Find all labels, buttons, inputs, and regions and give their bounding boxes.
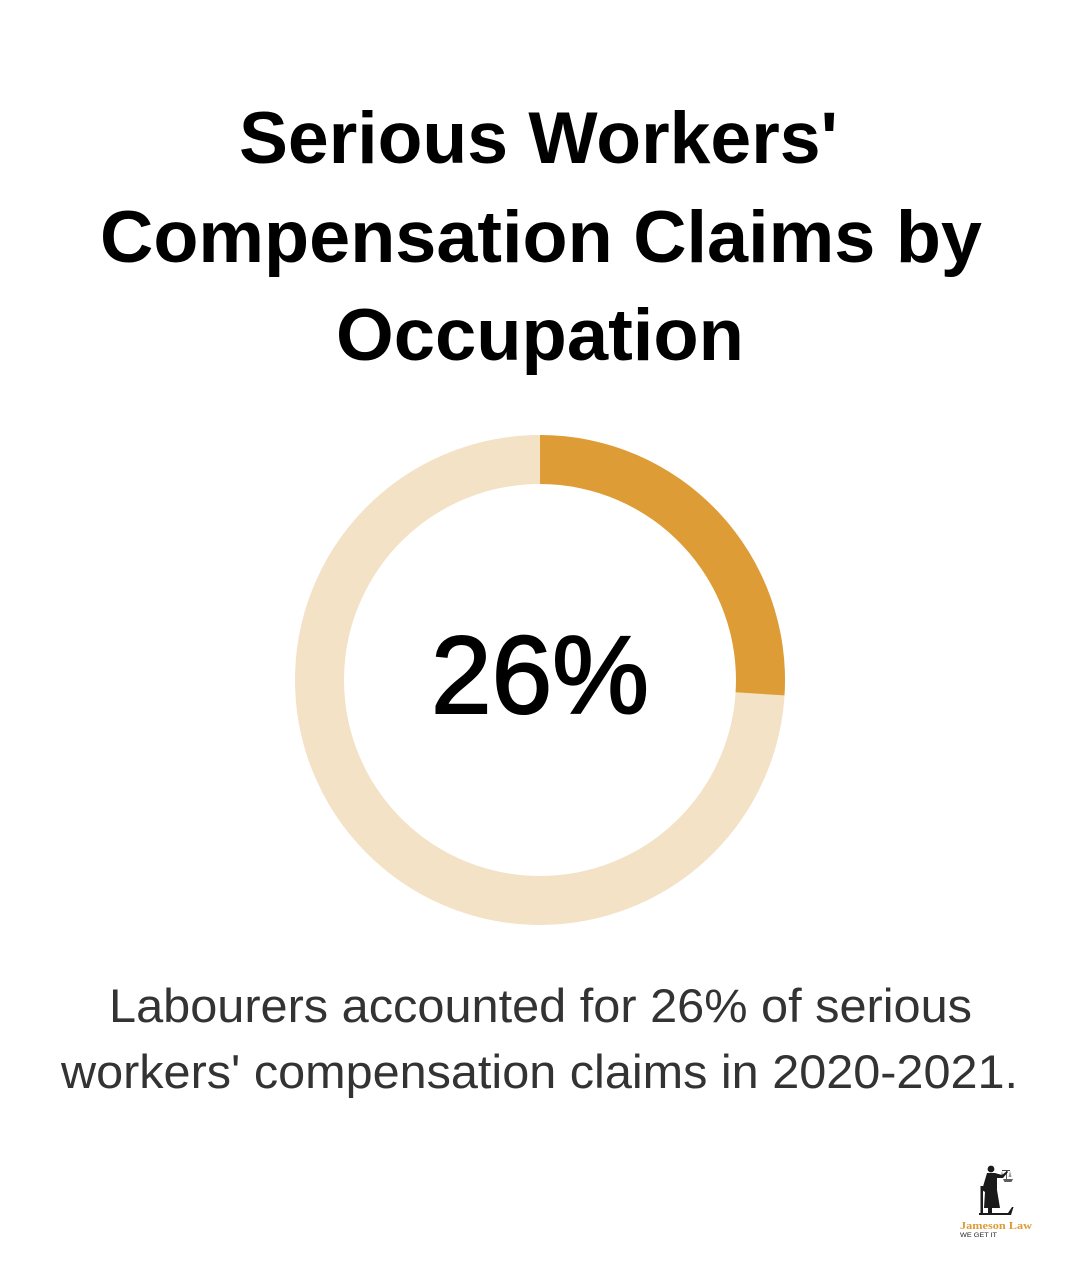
- logo: Jameson Law: [960, 1166, 1032, 1239]
- brand name: Jameson Law: [960, 1221, 1032, 1232]
- caption: workers' compensation claims in 2020-2021.: [60, 1045, 1018, 1098]
- title: Serious Workers': [239, 98, 838, 179]
- icon: lady justice: [979, 1166, 1014, 1215]
- title: Occupation: [336, 295, 744, 376]
- title: [100, 98, 982, 376]
- central percentage: 26%: [431, 614, 649, 737]
- caption: Labourers accounted for 26% of serious: [109, 979, 972, 1032]
- donut chart: 26%: [320, 435, 785, 900]
- title: Compensation Claims by: [100, 197, 982, 278]
- caption: [60, 979, 1018, 1098]
- tagline: WE GET IT: [960, 1232, 997, 1239]
